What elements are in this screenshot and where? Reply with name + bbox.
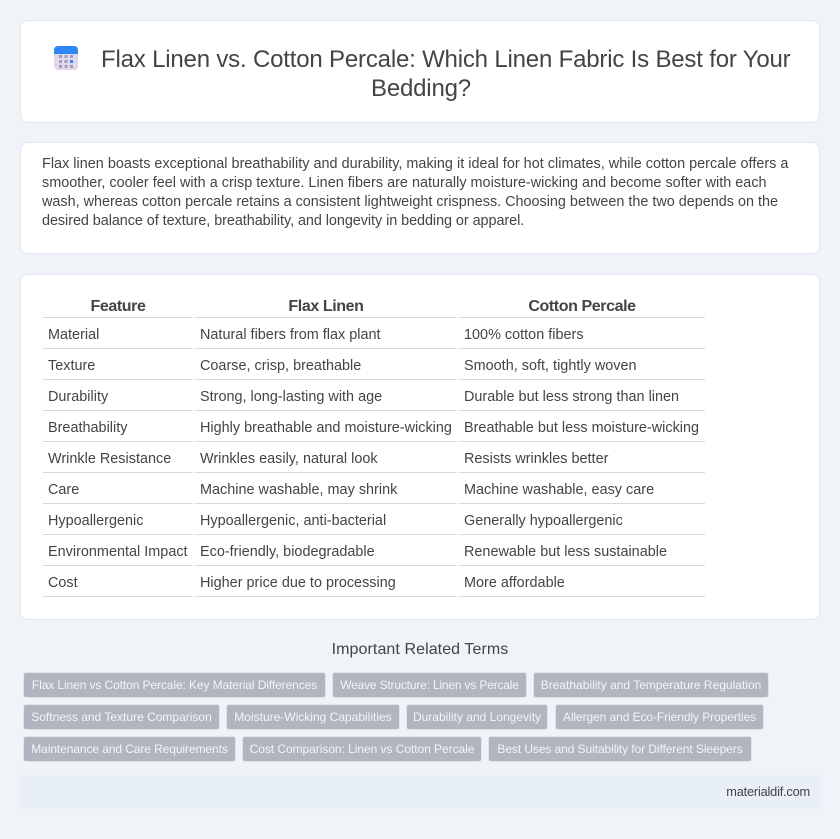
title: Bedding? [371,75,471,102]
text block: summary paragraph: Flax linen boasts exceptional breathability and durability, making it ideal for hot climates, while cotton percale offers a [42,156,788,172]
panel: comparison table [20,274,820,620]
text block: summary paragraph [42,156,788,229]
tag [242,736,482,762]
table header: Cotton Percale [528,298,636,315]
tag [555,704,764,730]
comparison table: Breathable but less moisture-wicking [464,420,699,436]
tag: Maintenance and Care Requirements [31,742,228,756]
footer source text: materialdif.com [726,784,810,799]
comparison table: Machine washable, may shrink [200,482,397,498]
comparison table: Resists wrinkles better [464,451,608,467]
footer [20,775,820,809]
text block: summary paragraph: wash, whereas cotton percale retains a consistent lightweight crispness. Choosing between the two depends on the [42,194,778,210]
tag [23,704,220,730]
table header [90,298,636,315]
tag [23,736,236,762]
tag: Durability and Longevity [413,710,541,724]
tag: Cost Comparison: Linen vs Cotton Percale [250,742,474,756]
tag: Allergen and Eco-Friendly Properties [563,710,756,724]
comparison table: Highly breathable and moisture-wicking [200,420,452,436]
text block: summary paragraph: smoother, cooler feel with a crisp texture. Linen fibers are naturally moisture-wicking and become softer with each [42,175,767,191]
panel: title header [20,20,820,123]
tag: Softness and Texture Comparison [31,710,212,724]
comparison table: Machine washable, easy care [464,482,654,498]
comparison table: Breathability [48,420,127,436]
comparison table: Smooth, soft, tightly woven [464,358,637,374]
tag [23,672,326,698]
tag [533,672,769,698]
tag: Best Uses and Suitability for Different Sleepers [497,742,743,756]
comparison table: Strong, long-lasting with age [200,389,382,405]
comparison table: Texture [48,358,95,374]
text block: summary paragraph: desired balance of texture, breathability, and longevity in bedding or apparel. [42,213,524,229]
comparison table: Coarse, crisp, breathable [200,358,361,374]
comparison table: Generally hypoallergenic [464,513,623,529]
comparison table: Material [48,327,99,343]
icon: calendar [54,46,78,70]
table header: Feature [90,298,146,315]
comparison table: Renewable but less sustainable [464,544,667,560]
comparison table: Wrinkles easily, natural look [200,451,378,467]
tag [488,736,752,762]
comparison table: Wrinkle Resistance [48,451,171,467]
heading: related terms: Important Related Terms [332,641,508,658]
comparison table: Hypoallergenic [48,513,143,529]
comparison table: Hypoallergenic, anti-bacterial [200,513,386,529]
table header: Flax Linen [288,298,364,315]
related term tags [23,672,769,762]
tag [226,704,400,730]
comparison table: Durable but less strong than linen [464,389,679,405]
tag: Weave Structure: Linen vs Percale [340,678,519,692]
comparison table: Eco-friendly, biodegradable [200,544,375,560]
comparison table: More affordable [464,575,565,591]
panel: summary [20,142,820,254]
tag: Moisture-Wicking Capabilities [234,710,392,724]
tag [332,672,527,698]
tag: Breathability and Temperature Regulation [541,678,761,692]
comparison table: Natural fibers from flax plant [200,327,381,343]
comparison table [43,298,705,597]
title: Flax Linen vs. Cotton Percale: Which Linen Fabric Is Best for Your [101,46,790,73]
title [101,46,790,102]
tag [406,704,548,730]
comparison table: Cost [48,575,78,591]
comparison table: Environmental Impact [48,544,188,560]
comparison table: Durability [48,389,108,405]
tag: Flax Linen vs Cotton Percale: Key Material Differences [32,678,317,692]
comparison table: 100% cotton fibers [464,327,584,343]
comparison table: Care [48,482,79,498]
comparison table: Higher price due to processing [200,575,396,591]
